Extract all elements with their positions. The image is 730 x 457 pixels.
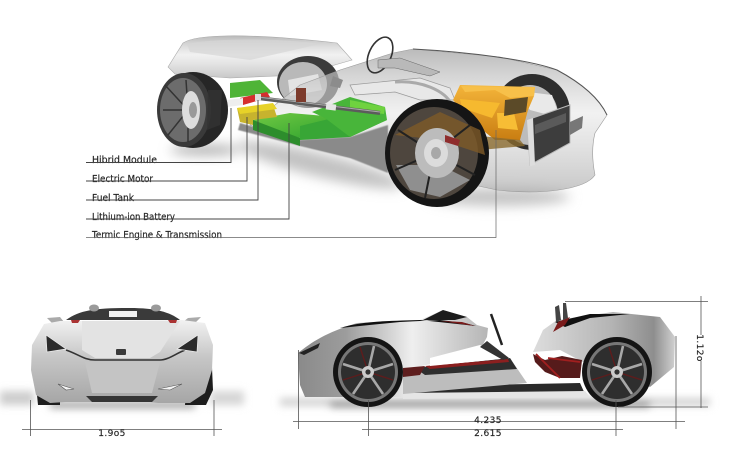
left side wheel [333, 337, 403, 407]
far rear wheel [277, 56, 343, 108]
height dimension [565, 296, 708, 408]
illustration: front view of car [0, 304, 244, 439]
callout: lithium-ion battery [86, 123, 289, 223]
callout: termic engine and transmission: Termic Engine & Transmission [91, 230, 222, 241]
mid body shell [250, 49, 607, 192]
green battery rear section [253, 97, 387, 146]
rear body roof edge [340, 320, 476, 328]
chassis floor [238, 123, 388, 173]
near rear wheel [157, 72, 228, 148]
badge [116, 349, 126, 355]
callout: electric motor: Electric Motor [92, 174, 153, 185]
callout: fuel tank: Fuel Tank [92, 193, 134, 204]
side mirror and seat [555, 303, 568, 322]
radiator [527, 105, 583, 166]
front width dimension: 1.9o5 [98, 429, 126, 439]
callout: hibrid module [86, 108, 231, 166]
windshield and roll hoops [47, 304, 201, 323]
near front wheel [385, 99, 489, 207]
front body [533, 312, 675, 387]
front body [31, 320, 213, 403]
chassis floor [403, 383, 585, 397]
grille line [66, 350, 185, 360]
tail detail [299, 343, 320, 355]
side steering wheel [491, 314, 502, 345]
illustration: side view of car [280, 296, 710, 439]
hybrid module [227, 80, 273, 107]
callout: lithium-ion battery: Lithium-ion Battery [92, 212, 175, 223]
front width dimension [22, 400, 222, 439]
roof highlight [187, 40, 320, 60]
far front wheel [494, 74, 570, 150]
headlights [46, 335, 66, 352]
drive shaft [255, 88, 380, 113]
steering wheel [362, 33, 440, 77]
air intake [86, 396, 158, 402]
ground shadow [170, 133, 570, 206]
fog lamps [58, 384, 74, 390]
overall length dimension [293, 336, 685, 429]
wheelbase dimension [362, 400, 623, 439]
top edge of front shell [413, 49, 607, 115]
tires [32, 345, 213, 405]
sill panel [403, 358, 527, 394]
front red suspension [533, 354, 582, 378]
interior seat tub [350, 78, 455, 100]
hood panel [82, 321, 180, 358]
callout: electric motor [86, 117, 247, 185]
overall length dimension: 4.235 [474, 416, 502, 426]
red suspension under rear [403, 366, 425, 377]
right side wheel [582, 337, 652, 407]
rear body [298, 310, 488, 397]
engine and transmission [453, 85, 535, 150]
yellow fuel tank [237, 105, 277, 125]
callout: hibrid module: Hibrid Module [92, 155, 157, 166]
red markers [71, 320, 177, 323]
front body roof edge [555, 314, 630, 327]
callout labels [86, 100, 496, 241]
side view ground shadow [280, 398, 710, 407]
callout: termic engine and transmission [86, 130, 496, 241]
lower valance [85, 362, 160, 393]
illustration: transparent car chassis cutaway [157, 33, 607, 207]
height dimension: 1.12o [694, 334, 704, 362]
wheelbase dimension: 2.615 [474, 429, 502, 439]
callout: fuel tank [86, 100, 258, 204]
front view ground shadow [0, 391, 244, 408]
rear body shell [168, 36, 352, 78]
